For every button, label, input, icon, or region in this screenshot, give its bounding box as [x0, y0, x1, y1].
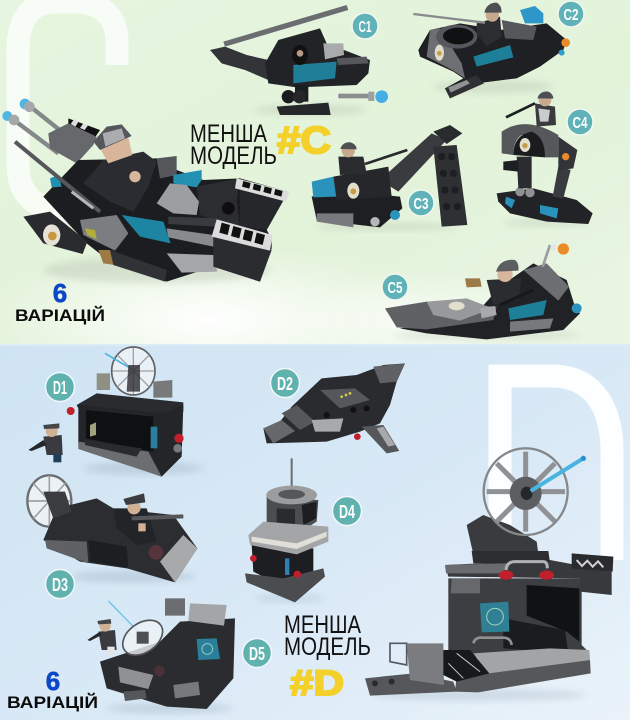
- model D3 hover tank with dish: [27, 475, 197, 583]
- model C3 vehicle with ramp: [312, 125, 467, 231]
- label: #D: #D: [290, 664, 344, 703]
- label: 6 variations top: 6: [53, 278, 67, 308]
- badge C5: [382, 274, 408, 300]
- label: 6 variations bottom: [7, 666, 98, 712]
- label: 6 variations bottom: 6: [46, 666, 60, 696]
- badge C1: C1: [358, 19, 372, 36]
- model D2 jet: [263, 363, 405, 453]
- badge D5: D5: [249, 644, 265, 664]
- badge C5: C5: [388, 280, 403, 297]
- panel: blue model D background: [0, 344, 630, 720]
- model C4 walker: [497, 92, 593, 227]
- label: 6 variations top: ВАРІАЦІЙ: [15, 306, 105, 325]
- badge C4: C4: [572, 115, 588, 132]
- panel: green model C background: [0, 0, 630, 395]
- badge C3: [408, 190, 434, 216]
- badge D2: D2: [277, 374, 293, 394]
- badge D4: [332, 496, 362, 526]
- model D4 tower: [245, 458, 328, 602]
- label: #C: #C: [277, 120, 331, 162]
- model C2 vehicle: [413, 3, 570, 98]
- badge D1: D1: [53, 378, 67, 398]
- badge C4: [567, 109, 593, 135]
- model C1 helicopter: [210, 5, 388, 116]
- label: 6 variations bottom: ВАРІАЦІЙ: [7, 693, 98, 712]
- badge D1: [46, 372, 74, 402]
- heading: smaller model D: МОДЕЛЬ: [284, 633, 371, 661]
- heading: smaller model C: МОДЕЛЬ: [190, 142, 277, 170]
- badge D3: [46, 570, 74, 598]
- label: 6 variations top: [15, 278, 105, 325]
- badge C2: [558, 1, 584, 27]
- heading: smaller model C: МЕНША: [190, 120, 267, 148]
- badge C1: [352, 13, 378, 39]
- heading: smaller model D: МЕНША: [284, 611, 361, 639]
- heading: smaller model D: [284, 611, 371, 661]
- heading: smaller model C: [190, 120, 277, 170]
- main model C vehicle: [2, 99, 289, 283]
- model C5 hover bike: [385, 243, 582, 340]
- badge D3: D3: [52, 575, 68, 595]
- badge D4: D4: [339, 502, 355, 522]
- badge D2: [270, 368, 300, 398]
- badge C3: C3: [414, 196, 429, 213]
- model D5 command base: [87, 598, 235, 714]
- badge C2: C2: [564, 7, 579, 24]
- model D1 radar station: [67, 347, 203, 477]
- main model D radar base: [365, 448, 613, 701]
- minifigure with gun: [28, 423, 63, 462]
- badge D5: [242, 638, 272, 668]
